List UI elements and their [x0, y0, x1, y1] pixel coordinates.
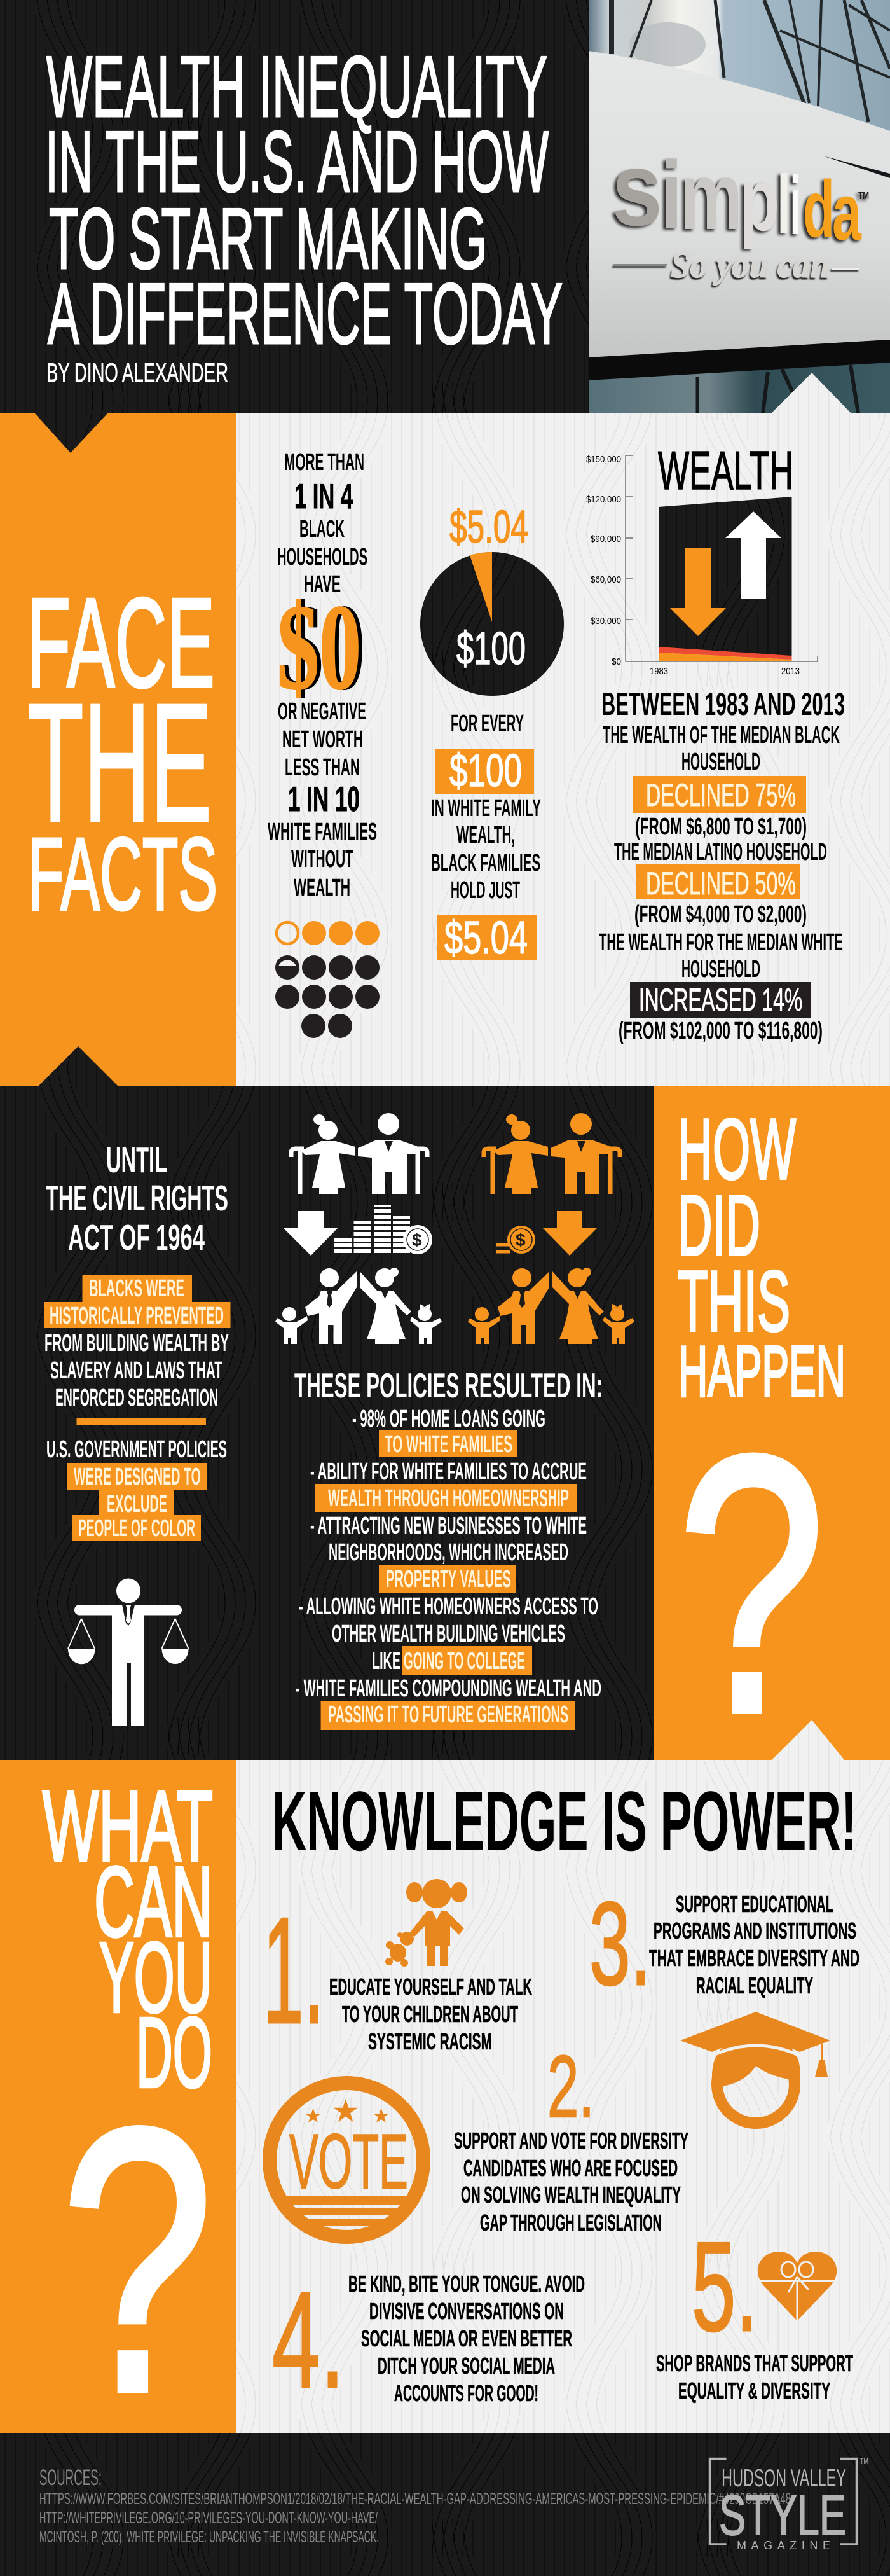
item 1: educate: EDUCATE YOURSELF AND TALK — [329, 1974, 532, 2000]
heading: how did this happen: HOW — [678, 1101, 796, 1197]
icon: question mark: ? — [678, 1380, 825, 1789]
heading: what can you do: DO — [136, 1997, 212, 2109]
item 5: shop brands — [656, 2216, 853, 2404]
logo: Simplida: s — [612, 130, 662, 247]
heading: face the facts: THE — [27, 669, 212, 857]
item 3: support education: 3. — [589, 1878, 651, 2010]
item 2: vote: CANDIDATES WHO ARE FOCUSED — [463, 2155, 678, 2181]
text: these policies resulted in: GOING TO COLLEGE — [404, 1648, 525, 1675]
panel: face the facts — [0, 373, 890, 1086]
chart: wealth 1983 to 2013: $120,000 — [586, 494, 621, 505]
logo: Simplida: m — [680, 142, 743, 249]
logo: Simplida: d — [803, 164, 835, 254]
panel: what can you do — [0, 1760, 890, 2470]
icon: white family passing wealth: $ — [412, 1230, 422, 1250]
text: until the civil rights act: UNTIL — [106, 1140, 167, 1181]
stat: $0: $0 — [281, 579, 365, 715]
icon: vote badge: ★ — [333, 2096, 358, 2127]
heading: what can you do: YOU — [99, 1922, 212, 2033]
sources: SOURCES: — [39, 2465, 102, 2490]
logo: Simplida — [612, 130, 869, 257]
chart: wealth 1983 to 2013: $150,000 — [586, 454, 621, 465]
text: for every $100: $5.04 — [444, 913, 528, 964]
item 4: be kind: DITCH YOUR SOCIAL MEDIA — [378, 2353, 555, 2379]
text: these policies resulted in: - WHITE FAMILIES COMPOUNDING WEALTH AND — [296, 1675, 601, 1702]
sources — [39, 2465, 791, 2546]
item 2: vote: SUPPORT AND VOTE FOR DIVERSITY — [454, 2128, 688, 2154]
text: these policies resulted in: - 98% OF HOME LOANS GOING — [352, 1406, 545, 1432]
logo: Simplida: p — [739, 149, 779, 249]
logo tagline — [613, 244, 859, 286]
sources: HTTP://WHITEPRIVILEGE.ORG/10-PRIVILEGES-YOU-DONT-KNOW-YOU-HAVE/ — [39, 2509, 378, 2527]
text: between 1983 and 2013: INCREASED 14% — [639, 982, 802, 1018]
text: until the civil rights act: THE CIVIL RIGHTS — [46, 1178, 228, 1219]
text: between 1983 and 2013: HOUSEHOLD — [681, 749, 760, 775]
icon: vote badge: VOTE — [289, 2118, 408, 2205]
text: for every $100: $100 — [449, 745, 522, 796]
heading: what can you do: WHAT — [43, 1771, 213, 1882]
text: these policies resulted in: PASSING IT TO FUTURE GENERATIONS — [328, 1701, 568, 1728]
pie chart: $5.04 of $100: $100 — [456, 623, 526, 674]
text: net worth column: BLACK — [299, 516, 345, 543]
item 4: be kind: SOCIAL MEDIA OR EVEN BETTER — [361, 2325, 572, 2351]
icon: girl with teddy bear — [385, 1879, 467, 1967]
text: net worth column: LESS THAN — [285, 754, 360, 781]
panel: photo of Simplida sign — [588, 0, 890, 413]
chart: wealth 1983 to 2013: 1983 — [650, 666, 668, 677]
text: for every $100 — [431, 710, 541, 964]
title — [45, 38, 563, 362]
text: these policies resulted in: - ABILITY FOR WHITE FAMILIES TO ACCRUE — [310, 1458, 587, 1485]
text: net worth column: NET WORTH — [282, 726, 363, 753]
text: until the civil rights act: SLAVERY AND LAWS THAT — [50, 1357, 222, 1384]
text: net worth column: HOUSEHOLDS — [277, 544, 367, 571]
text: net worth column: MORE THAN — [284, 449, 364, 476]
icon: graduate — [680, 2012, 830, 2123]
heading: what can you do — [43, 1771, 213, 2109]
logo: Simplida: a — [832, 167, 862, 257]
logo: Simplida: l — [777, 158, 791, 251]
text: until the civil rights act: ENFORCED SEGREGATION — [55, 1385, 218, 1411]
heading: how did this happen — [678, 1101, 846, 1411]
chart: wealth 1983 to 2013: $90,000 — [591, 534, 621, 544]
text: until the civil rights act: ACT OF 1964 — [68, 1217, 205, 1258]
logo: Hudson Valley Style Magazine: TM — [860, 2456, 868, 2466]
item 4: be kind: ACCOUNTS FOR GOOD! — [394, 2380, 538, 2406]
text: for every $100: WEALTH, — [456, 822, 515, 848]
chart: wealth 1983 to 2013: $30,000 — [591, 616, 621, 627]
heading: face the facts: FACTS — [28, 817, 217, 932]
icon: vote badge — [267, 2083, 426, 2245]
heading: how did this happen: DID — [678, 1177, 760, 1273]
text: these policies resulted in: PROPERTY VALUES — [386, 1566, 511, 1593]
text: until the civil rights act: HISTORICALLY PREVENTED — [50, 1303, 224, 1329]
chart: wealth 1983 to 2013: WEALTH — [658, 441, 793, 501]
icon: orange family with less wealth: $ — [516, 1230, 526, 1250]
text: between 1983 and 2013: HOUSEHOLD — [681, 956, 760, 983]
item 4: be kind: 4. — [272, 2263, 345, 2416]
text: until the civil rights act: FROM BUILDING WEALTH BY — [44, 1330, 229, 1357]
item 1: educate: SYSTEMIC RACISM — [368, 2028, 492, 2054]
text: between 1983 and 2013: DECLINED 50% — [646, 866, 796, 901]
text: net worth column: 1 IN 4 — [294, 476, 353, 516]
item 1: educate — [263, 1879, 532, 2055]
logo: Simplida: TM — [858, 191, 869, 202]
text: net worth column — [268, 449, 377, 901]
item 2: vote — [267, 2038, 688, 2245]
text: net worth column: OR NEGATIVE — [278, 698, 366, 725]
text: until the civil rights act: PEOPLE OF COLOR — [78, 1515, 195, 1542]
text: these policies resulted in: TO WHITE FAMILIES — [385, 1431, 512, 1458]
chart: wealth 1983 to 2013 — [586, 441, 818, 677]
logo: Hudson Valley Style Magazine — [709, 2456, 868, 2552]
logo: Simplida: i — [790, 159, 802, 252]
item 2: vote: ON SOLVING WEALTH INEQUALITY — [461, 2182, 681, 2208]
item 1: educate: 1. — [263, 1887, 324, 2055]
text: until the civil rights act: BLACKS WERE — [89, 1275, 184, 1302]
text: for every $100: FOR EVERY — [451, 710, 524, 737]
dot chart: 1 in 4 and 1 in 10 — [275, 921, 380, 1038]
pie chart: $5.04 of $100 — [420, 502, 564, 696]
text: net worth column: WEALTH — [294, 875, 350, 901]
chart: wealth 1983 to 2013: $60,000 — [591, 574, 621, 585]
logo: Simplida: i — [660, 141, 683, 248]
icon: question mark: ? — [61, 2051, 214, 2470]
text: net worth column: WHITE FAMILIES — [268, 819, 377, 845]
text: these policies resulted in: NEIGHBORHOODS, WHICH INCREASED — [329, 1539, 568, 1566]
panel: footer — [0, 2433, 890, 2576]
text: these policies resulted in: - ALLOWING WHITE HOMEOWNERS ACCESS TO — [299, 1593, 598, 1620]
item 3: support education — [589, 1878, 859, 2123]
item 1: educate: TO YOUR CHILDREN ABOUT — [342, 2001, 518, 2027]
arrow: down — [670, 548, 726, 636]
text: these policies resulted in: - ATTRACTING NEW BUSINESSES TO WHITE — [310, 1513, 587, 1539]
text: until the civil rights act: U.S. GOVERNMENT POLICIES — [46, 1436, 227, 1463]
logo: Hudson Valley Style Magazine: MAGAZINE — [737, 2539, 830, 2552]
sources: MCINTOSH, P. (200). WHITE PRIVILEGE: UNPACKING THE INVISIBLE KNAPSACK. — [39, 2528, 379, 2546]
panel: how did this happen — [0, 1086, 890, 1789]
icon: white family passing wealth — [275, 1113, 442, 1344]
logo tagline: So you can — [671, 244, 830, 286]
text: between 1983 and 2013 — [599, 686, 845, 1044]
text: until the civil rights act: EXCLUDE — [107, 1491, 167, 1518]
text: these policies resulted in: THESE POLICIES RESULTED IN: — [294, 1366, 603, 1405]
heading: face the facts — [27, 571, 217, 932]
text: between 1983 and 2013: DECLINED 75% — [646, 777, 796, 813]
icon: vote badge: ★ — [305, 2106, 321, 2126]
text: for every $100: BLACK FAMILIES — [431, 850, 540, 876]
icon: man with scales — [68, 1579, 188, 1726]
text: net worth column: HAVE — [304, 571, 341, 598]
item 4: be kind: DIVISIVE CONVERSATIONS ON — [369, 2298, 564, 2324]
arrow: up — [725, 511, 781, 599]
heading: face the facts: FACE — [27, 571, 215, 714]
item 4: be kind: BE KIND, BITE YOUR TONGUE. AVOID — [348, 2271, 585, 2297]
icon: orange family with less wealth — [468, 1113, 634, 1344]
text: until the civil rights act — [44, 1140, 230, 1542]
text: these policies resulted in: LIKE — [372, 1648, 400, 1675]
icon: gift heart — [757, 2252, 837, 2322]
item 5: shop brands: 5. — [692, 2216, 758, 2358]
item 2: vote: 2. — [547, 2038, 594, 2136]
panel: header — [0, 0, 589, 413]
icon: vote badge: ★ — [373, 2106, 389, 2126]
byline: BY DINO ALEXANDER — [46, 357, 228, 387]
item 4: be kind — [272, 2263, 585, 2416]
pie chart: $5.04 of $100: $5.04 — [449, 502, 528, 553]
text: until the civil rights act: WERE DESIGNED TO — [74, 1464, 201, 1490]
text: these policies resulted in — [294, 1366, 603, 1730]
heading: how did this happen: THIS — [678, 1253, 790, 1349]
stat: $0: $0 — [277, 579, 361, 715]
text: these policies resulted in: WEALTH THROUGH HOMEOWNERSHIP — [328, 1485, 569, 1512]
text: for every $100: HOLD JUST — [451, 877, 520, 904]
chart: wealth 1983 to 2013: 2013 — [781, 666, 800, 677]
text: net worth column: 1 IN 10 — [288, 779, 360, 819]
heading: what can you do: CAN — [94, 1846, 212, 1958]
title: TO START MAKING — [49, 190, 487, 287]
text: net worth column: WITHOUT — [291, 846, 353, 873]
chart: wealth 1983 to 2013: $0 — [612, 656, 621, 667]
item 2: vote: GAP THROUGH LEGISLATION — [480, 2210, 662, 2236]
text: these policies resulted in: OTHER WEALTH BUILDING VEHICLES — [332, 1621, 565, 1647]
text: for every $100: IN WHITE FAMILY — [431, 795, 541, 822]
